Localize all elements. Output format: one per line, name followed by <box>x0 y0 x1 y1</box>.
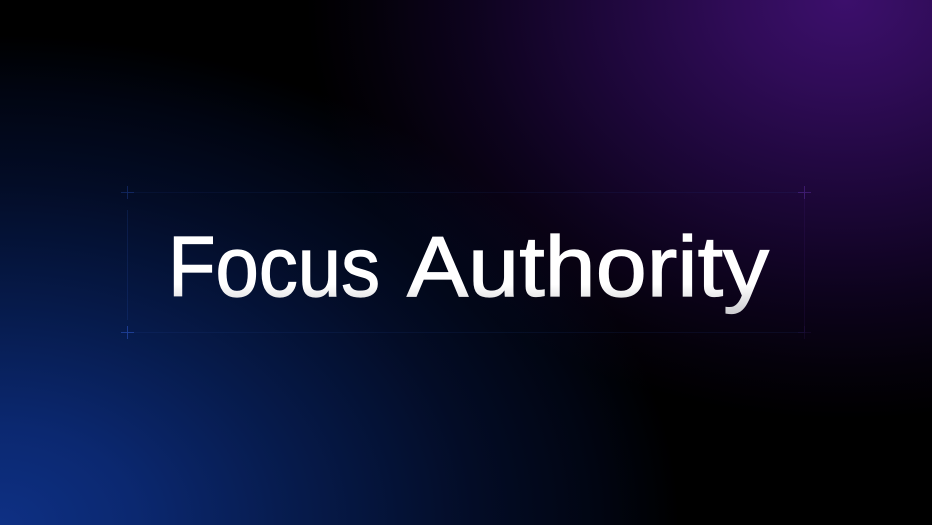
title: Focus <box>168 220 380 315</box>
decorative frame with corner crosses <box>121 186 811 339</box>
title <box>168 220 770 315</box>
title: Authority <box>407 220 770 315</box>
